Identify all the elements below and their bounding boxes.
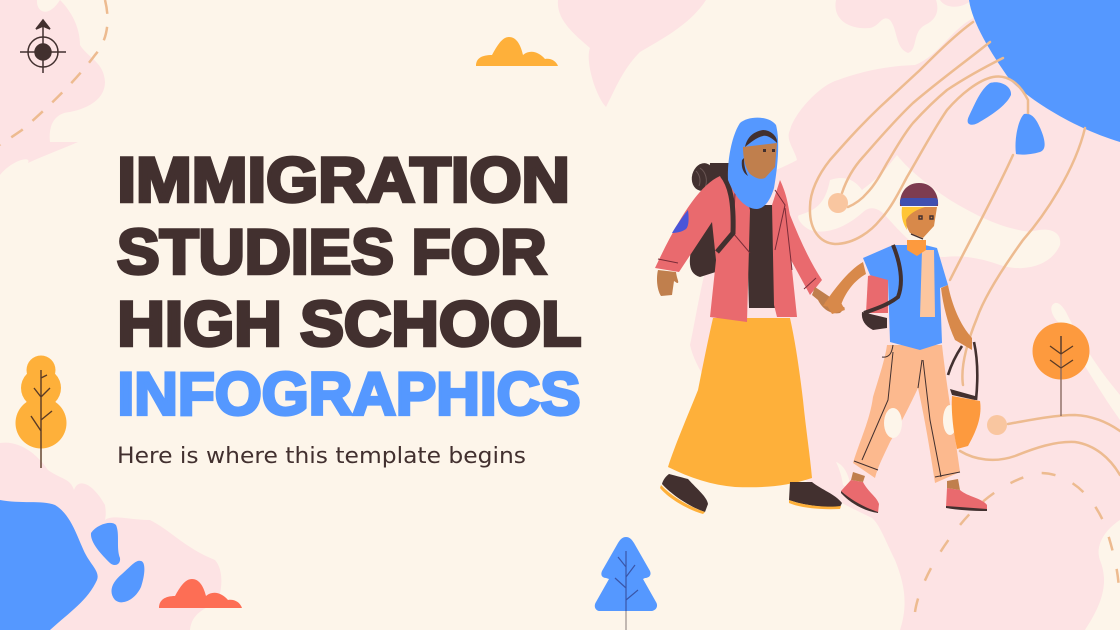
pants [853,345,960,483]
title: INFOGRAPHICS [118,360,580,427]
cream ribbons in right land mass [798,155,1120,630]
title: HIGH SCHOOL [117,290,581,360]
right arm [823,262,866,308]
pink blob: right land mass [690,17,1120,630]
orange scarf [907,240,926,256]
backpack [689,161,732,277]
pants seams [854,345,960,477]
dashed route: bottom right [915,473,1119,612]
scarf strip [920,250,935,317]
cloud: orange top [476,37,558,66]
tree: blue bottom [595,537,657,630]
eyes [763,149,775,152]
shirt [746,205,778,308]
route lines: top right loops [810,22,1085,385]
blue blob: bottom left [0,500,98,630]
route dot: lower [987,415,1007,435]
pink blob: top right [835,0,972,53]
right hand [812,287,845,313]
title: IMMIGRATION [117,146,570,216]
blue drops: bottom left [91,523,144,602]
jacket details [658,190,816,289]
tree: orange right [1032,322,1090,416]
ankles [851,472,960,490]
shoes [662,474,708,512]
bag [948,342,980,449]
title: STUDIES FOR [117,218,546,288]
knee highlights [884,408,902,438]
title [117,146,581,427]
icon: compass marker [20,20,66,73]
hair [902,207,925,230]
left hand [657,270,678,296]
subtitle: Here is where this template begins [117,444,526,469]
shoes [841,480,879,513]
cloud: red bottom [159,579,242,608]
pink blob: bottom left [0,443,221,630]
illustration: boy [823,183,987,513]
illustration: woman [655,118,845,514]
pink blob: top left [0,0,105,175]
tree: yellow left [16,356,66,468]
jacket [655,176,822,322]
dashed route: top left [0,0,108,145]
route dot: upper [828,193,848,213]
patch [672,210,689,233]
eyes and mouth [911,216,933,239]
beanie [900,183,938,206]
backpack strap [717,175,733,252]
backpack strap [864,245,901,313]
face [904,207,937,238]
route lines: bottom right [960,415,1120,475]
face [743,143,777,179]
shirt [863,245,948,350]
small backpack [862,270,888,330]
hair [742,130,777,176]
hijab [728,118,778,209]
pink blob: top centre [558,0,706,107]
blue blob: top right [969,0,1120,142]
skirt [668,318,812,487]
blue drops: top right [968,82,1045,155]
left arm [941,285,972,350]
